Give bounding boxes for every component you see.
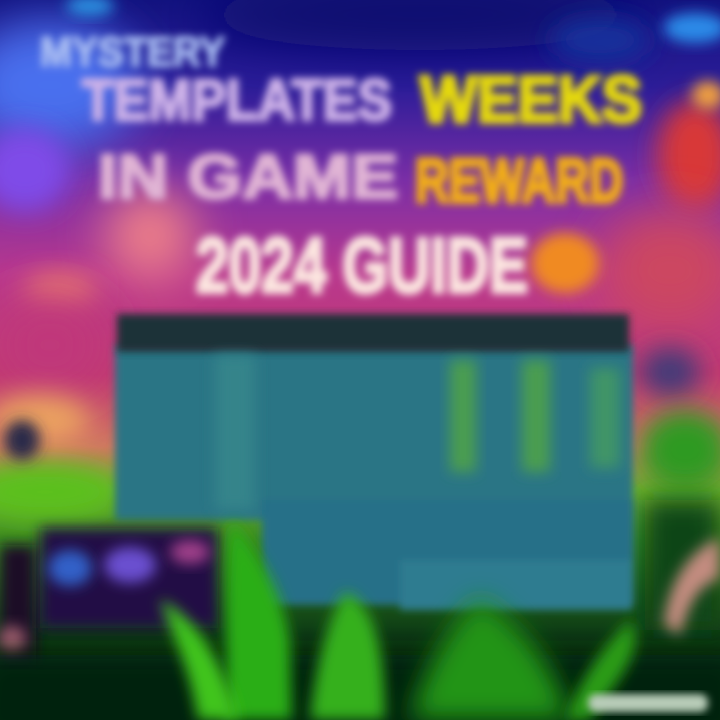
table panel (115, 314, 634, 610)
title line 3: IN GAME (98, 143, 398, 212)
title line 3 highlight: REWARD (415, 147, 623, 216)
title line 2 highlight: WEEKS (420, 62, 642, 136)
table body (115, 345, 634, 610)
green check column 3 (590, 368, 620, 468)
landscape: green hills (0, 410, 720, 630)
green check column 2 (522, 360, 550, 472)
watermark label (588, 694, 708, 712)
badge: orange icon (531, 233, 599, 293)
title: headline text (40, 28, 642, 309)
green check column 1 (450, 360, 476, 472)
title line 1: MYSTERY (40, 28, 225, 75)
lighter column (215, 355, 255, 510)
inset screenshot (0, 528, 218, 665)
character: figure at right edge (664, 538, 720, 635)
title line 2: TEMPLATES (82, 68, 392, 133)
foreground: green plants (0, 520, 720, 720)
title line 4: 2024 GUIDE (196, 221, 528, 309)
table header (117, 314, 629, 352)
